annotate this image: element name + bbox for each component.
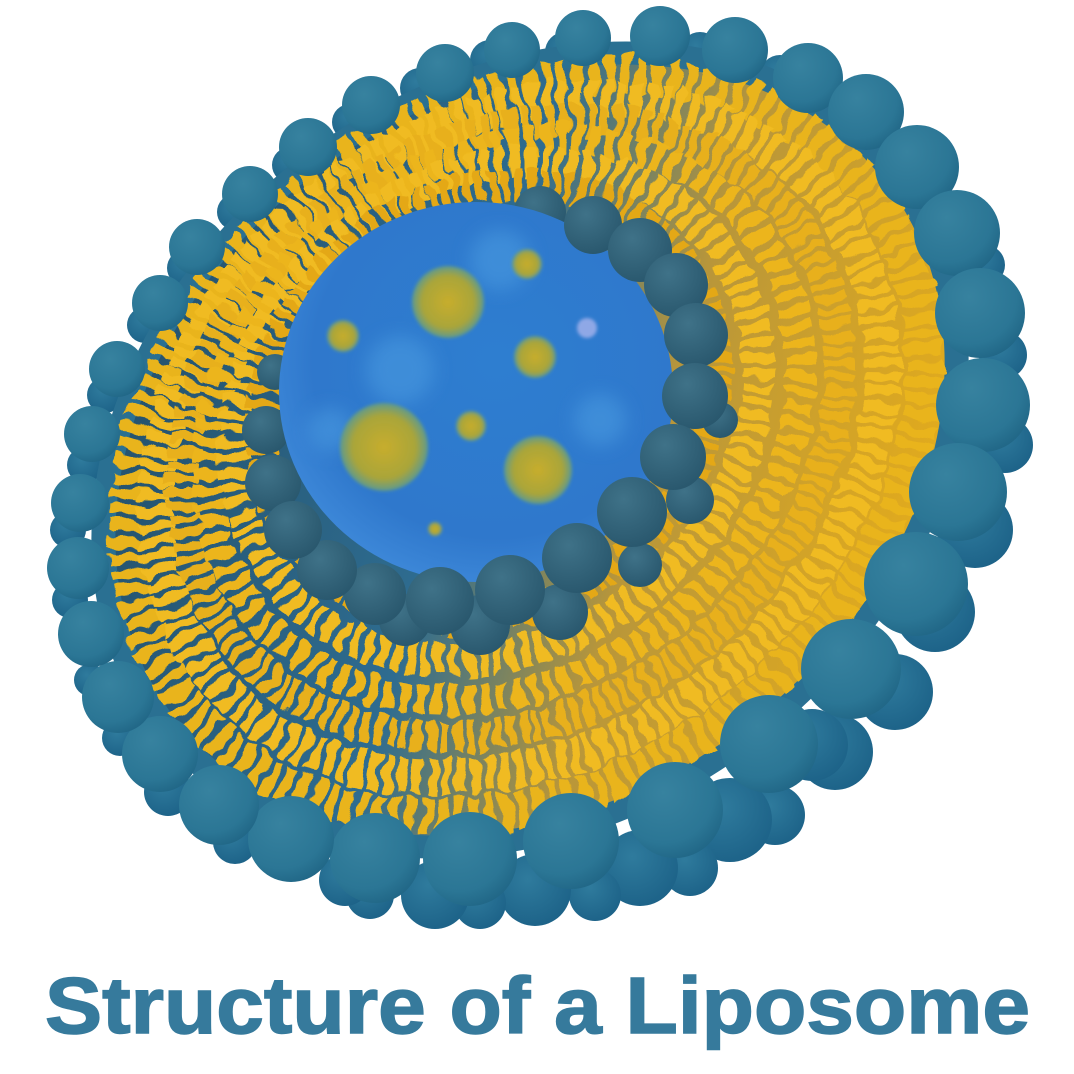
- front ring of outer phospholipid heads: [47, 6, 1030, 906]
- lipid bilayer tails: inner leaflet: [96, 25, 912, 815]
- back layer of phospholipid heads: [50, 32, 1033, 929]
- encapsulated drug particles: [327, 249, 597, 536]
- central aqueous core: [279, 202, 673, 582]
- inner ring of phospholipid heads: [264, 196, 728, 635]
- inner heads behind the core: [242, 186, 738, 655]
- core highlights: [308, 230, 626, 452]
- title: Structure of a Liposome: [45, 961, 1030, 1050]
